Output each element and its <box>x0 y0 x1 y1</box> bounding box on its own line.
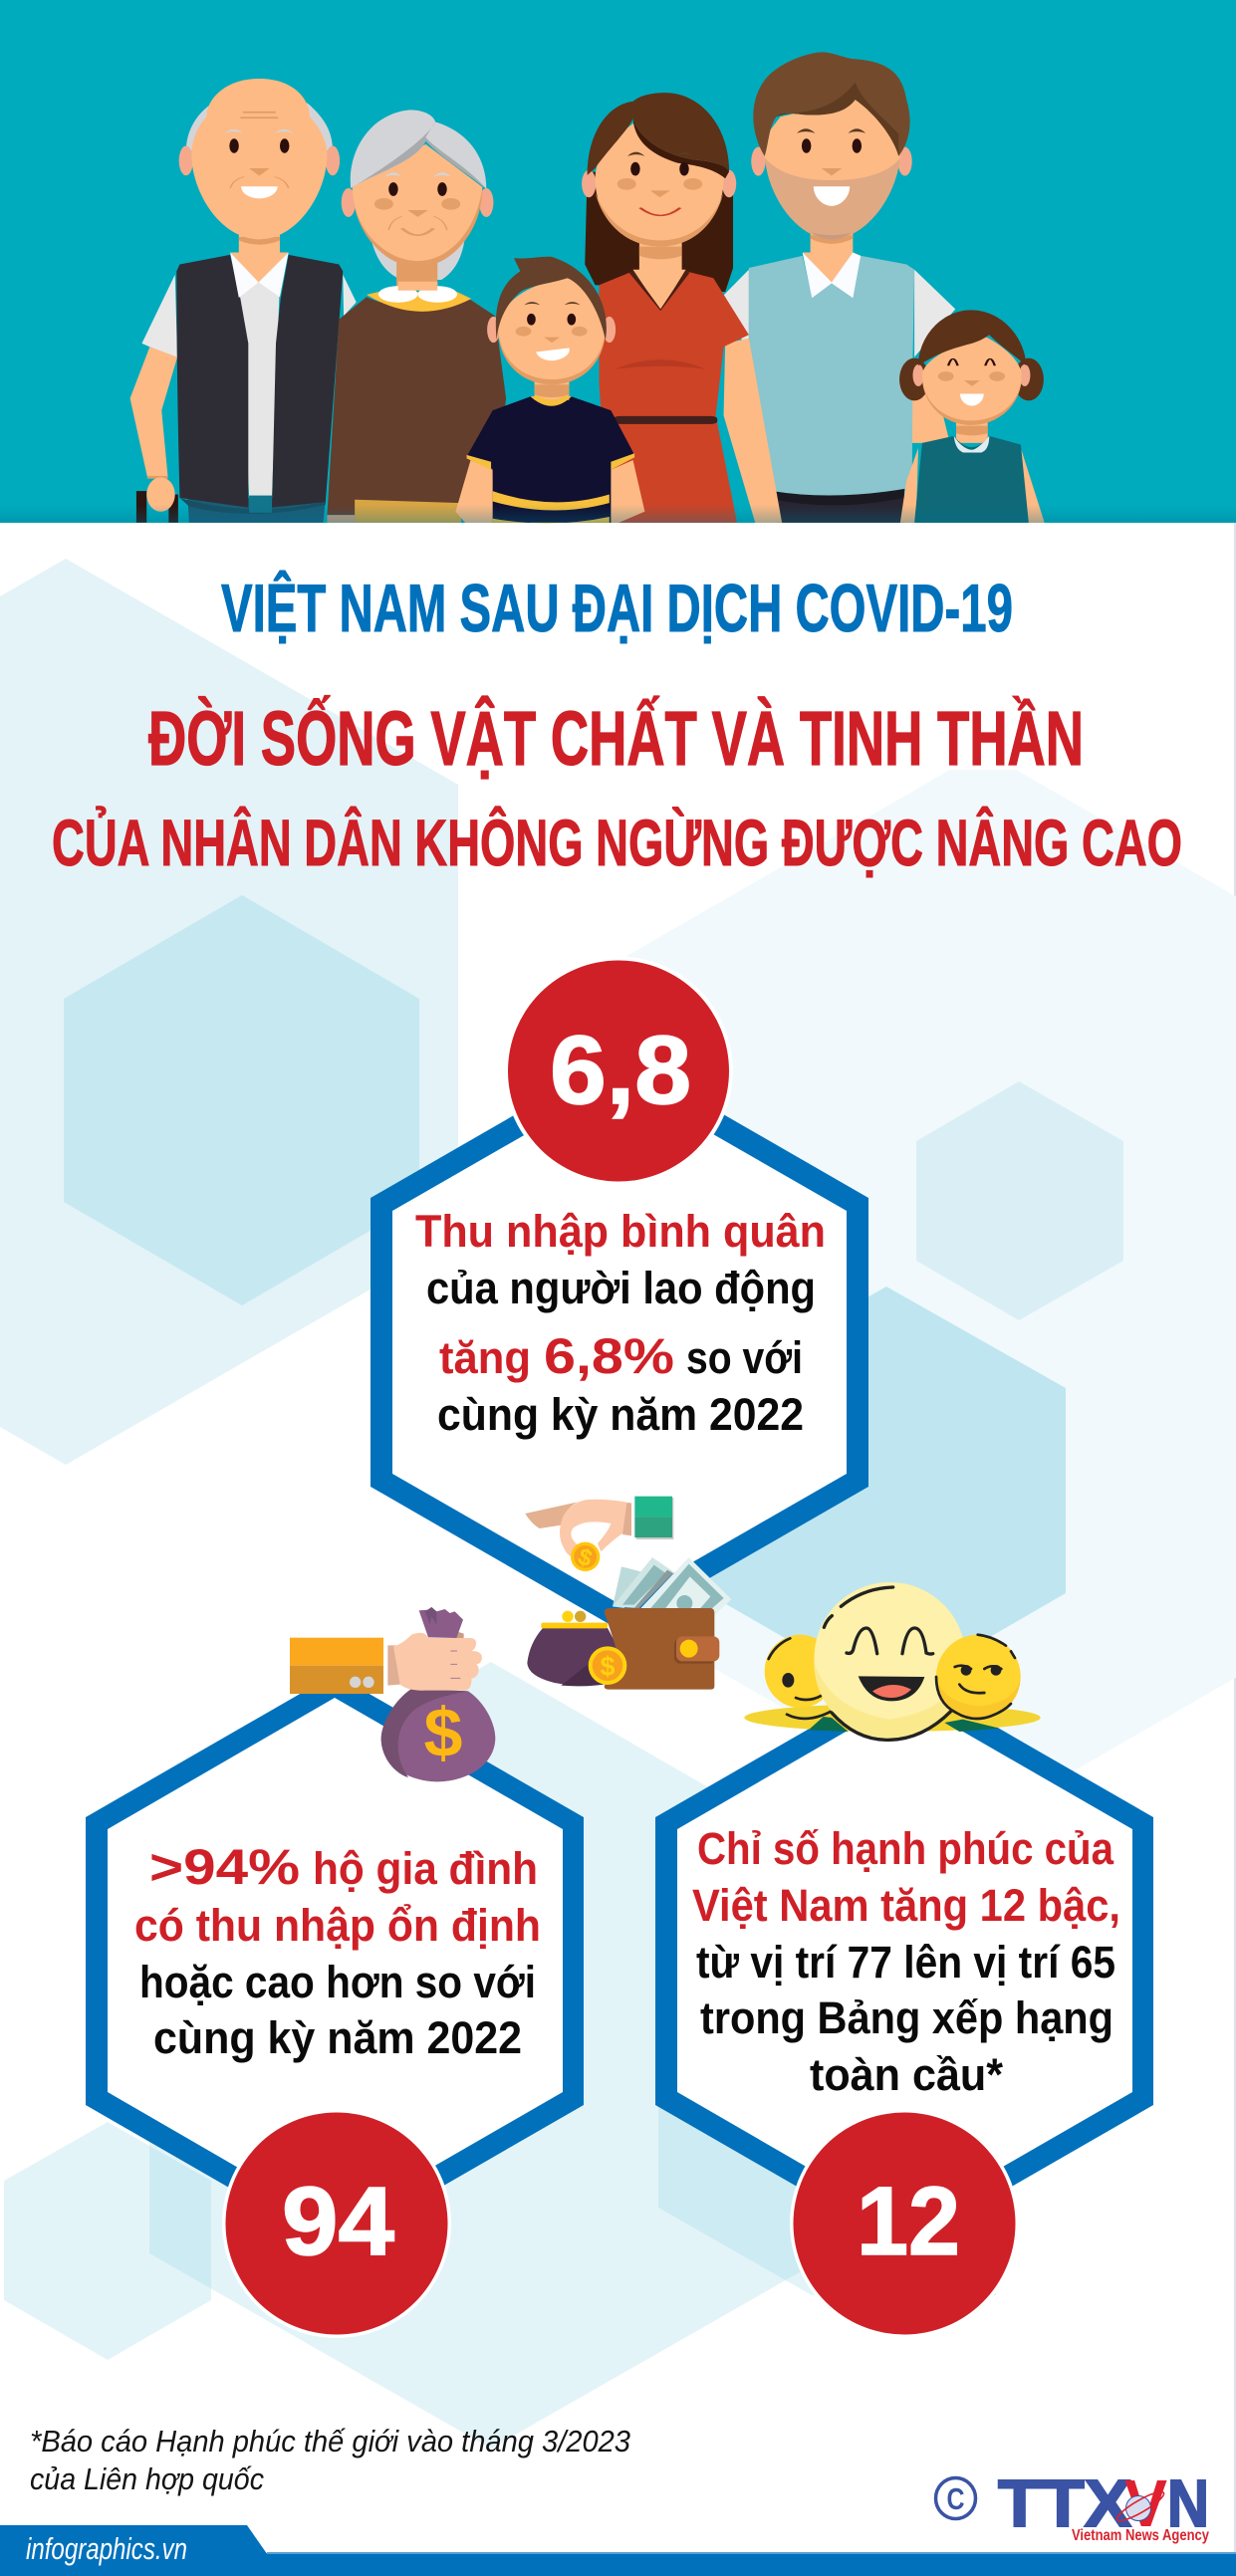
grandfather <box>130 79 357 523</box>
income text: Thu nhập bình quân <box>415 1206 826 1257</box>
girl <box>899 310 1045 523</box>
icon: hand, coin, wallet and purse <box>525 1497 731 1690</box>
happiness text: từ vị trí 77 lên vị trí 65 <box>696 1937 1115 1988</box>
happiness text: Chỉ số hạnh phúc của <box>697 1823 1114 1874</box>
income text: cùng kỳ năm 2022 <box>437 1389 804 1440</box>
footer bar: infographics.vn <box>26 2531 187 2566</box>
footnote: của Liên hợp quốc <box>30 2461 264 2496</box>
household text <box>134 1839 541 2063</box>
logo: TTXVN: C <box>946 2481 964 2516</box>
logo: TTXVN <box>936 2466 1209 2544</box>
icon: smiling faces <box>744 1582 1041 1740</box>
logo: TTXVN: Vietnam News Agency <box>1072 2527 1209 2544</box>
footer bar <box>0 2525 1236 2576</box>
grandmother <box>327 110 506 523</box>
stat circle 6,8 <box>504 956 733 1185</box>
household text: hộ gia đình <box>313 1843 538 1894</box>
father <box>724 52 955 523</box>
logo: TTXVN: TTX <box>998 2466 1131 2541</box>
stat circle 94: 94 <box>282 2167 394 2275</box>
icon: hand, coin, wallet and purse: $ <box>575 1543 596 1571</box>
happiness text: Việt Nam tăng 12 bậc, <box>692 1880 1120 1931</box>
footnote <box>30 2424 630 2496</box>
boy <box>455 257 644 523</box>
background hexagon pattern <box>0 559 1236 2449</box>
income text: 6,8% <box>544 1328 674 1384</box>
stat circle 12: 12 <box>857 2167 960 2275</box>
mother <box>582 93 782 523</box>
panel: income hexagon <box>371 956 868 1630</box>
income text: của người lao động <box>426 1263 816 1313</box>
panel: happiness hexagon <box>655 1674 1153 2338</box>
footnote: *Báo cáo Hạnh phúc thế giới vào tháng 3/2023 <box>30 2424 630 2459</box>
icon: hand, coin, wallet and purse: $ <box>601 1651 616 1681</box>
icon: hand holding money bag: $ <box>424 1694 462 1771</box>
stat circle 94 <box>222 2109 451 2338</box>
stat circle 6,8: 6,8 <box>550 1016 691 1124</box>
household text: hoặc cao hơn so với <box>139 1957 536 2007</box>
header illustration: family <box>0 0 1236 523</box>
stat circle 12 <box>790 2109 1019 2338</box>
household text: có thu nhập ổn định <box>134 1900 541 1951</box>
happiness text: toàn cầu* <box>810 2049 1003 2100</box>
logo: TTXVN: V <box>1124 2466 1167 2541</box>
household text: >94% <box>149 1839 300 1895</box>
happiness text: trong Bảng xếp hạng <box>700 1992 1113 2043</box>
income text: so với <box>686 1332 803 1383</box>
panel: stable income hexagon <box>86 1674 584 2338</box>
happiness text <box>692 1823 1120 2100</box>
icon: hand holding money bag <box>290 1607 495 1781</box>
household text: cùng kỳ năm 2022 <box>153 2012 522 2063</box>
income text: tăng <box>439 1332 531 1383</box>
income text <box>415 1206 826 1440</box>
logo: TTXVN: N <box>1167 2466 1209 2541</box>
